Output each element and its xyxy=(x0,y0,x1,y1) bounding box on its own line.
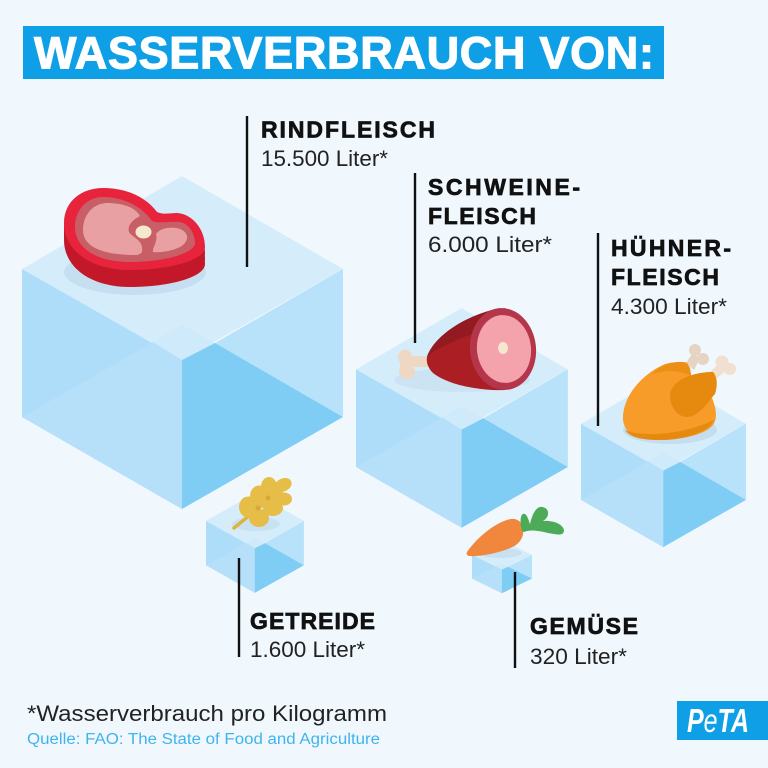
icon: steak xyxy=(64,188,206,295)
footnote: *Wasserverbrauch pro Kilogramm xyxy=(27,701,387,726)
label: gemuese xyxy=(530,613,638,669)
logo: peta: PeTA xyxy=(687,702,749,739)
label: huehnerfleisch: FLEISCH xyxy=(611,264,719,290)
label: schweinefleisch: 6.000 Liter* xyxy=(428,232,552,257)
label: schweinefleisch: FLEISCH xyxy=(428,203,536,229)
cube: gemuese xyxy=(472,540,532,593)
label: huehnerfleisch: 4.300 Liter* xyxy=(611,294,727,319)
label: schweinefleisch xyxy=(428,174,580,257)
label: huehnerfleisch xyxy=(611,235,731,319)
cube: schweinefleisch xyxy=(356,308,568,528)
source: Quelle: FAO: The State of Food and Agriculture xyxy=(27,731,380,748)
label: gemuese: GEMÜSE xyxy=(530,613,638,639)
icon: wheat xyxy=(232,475,294,531)
cube: getreide xyxy=(206,493,304,593)
icon: ham xyxy=(394,305,540,393)
cube: huehnerfleisch xyxy=(581,376,746,547)
label: rindfleisch xyxy=(261,116,435,171)
icon: chicken xyxy=(623,344,736,444)
cube: rindfleisch xyxy=(22,176,343,509)
icon: carrot xyxy=(467,507,564,558)
label: gemuese: 320 Liter* xyxy=(530,644,627,669)
label: rindfleisch: 15.500 Liter* xyxy=(261,146,388,171)
label: schweinefleisch: SCHWEINE- xyxy=(428,174,580,200)
leader lines xyxy=(239,116,598,668)
label: getreide: GETREIDE xyxy=(250,608,375,634)
label: getreide xyxy=(250,608,375,662)
title: WASSERVERBRAUCH VON: xyxy=(34,28,654,78)
label: getreide: 1.600 Liter* xyxy=(250,637,365,662)
label: rindfleisch: RINDFLEISCH xyxy=(261,116,435,142)
label: huehnerfleisch: HÜHNER- xyxy=(611,235,731,261)
